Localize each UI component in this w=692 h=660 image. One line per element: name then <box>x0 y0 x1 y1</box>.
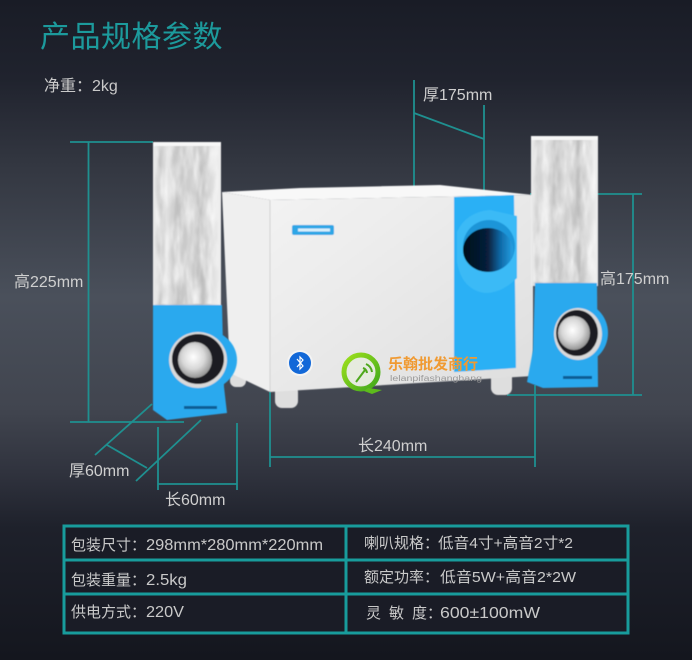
dimension labels: 厚175mm <box>423 87 492 104</box>
net weight label: 净重：2kg <box>44 77 118 95</box>
table text: 600±100mW <box>440 605 541 622</box>
watermark logo: 乐翰批发商行 <box>388 355 478 373</box>
table text: 低音4寸+高音2寸*2 <box>438 535 573 552</box>
water column <box>153 142 221 307</box>
subwoofer body <box>222 192 270 392</box>
subwoofer feet <box>230 368 512 408</box>
table text <box>71 535 577 622</box>
dimension labels: 长60mm <box>165 491 225 509</box>
table text: 额定功率： <box>364 569 439 586</box>
horn port <box>457 210 517 293</box>
table text: 220V <box>146 604 184 621</box>
speaker driver <box>554 308 602 360</box>
table text: 包装重量： <box>71 572 146 589</box>
brand badge <box>292 225 334 235</box>
blue base <box>527 283 598 388</box>
table text: 灵 <box>366 605 381 622</box>
dimension labels <box>14 87 669 509</box>
dimension labels: 高225mm <box>14 273 83 291</box>
blue front panel <box>454 195 516 372</box>
left speaker <box>153 142 237 420</box>
table text: 低音5W+高音2*2W <box>440 569 577 586</box>
brand mark <box>184 406 217 409</box>
bluetooth icon <box>287 350 313 376</box>
watermark logo: lelanpifashanghang <box>390 374 482 383</box>
right speaker <box>527 136 608 388</box>
dimension labels: 长240mm <box>358 437 427 455</box>
specification table <box>64 526 628 633</box>
table text: 2.5kg <box>146 572 187 589</box>
table text: 喇叭规格： <box>364 535 439 552</box>
title: 产品规格参数 <box>40 21 223 54</box>
dimension labels: 厚60mm <box>69 463 129 480</box>
table text: 供电方式： <box>71 604 146 621</box>
dimension lines <box>70 80 642 490</box>
blue base <box>153 305 227 420</box>
table text: 敏 <box>389 605 404 622</box>
brand mark <box>563 376 592 379</box>
water column <box>531 136 598 286</box>
speaker driver <box>169 332 227 388</box>
table text: 度： <box>412 605 442 622</box>
dimension labels: 高175mm <box>600 270 669 288</box>
watermark logo <box>344 355 482 394</box>
subwoofer <box>222 185 533 408</box>
table text: 298mm*280mm*220mm <box>146 537 323 554</box>
table text: 包装尺寸： <box>71 537 146 554</box>
